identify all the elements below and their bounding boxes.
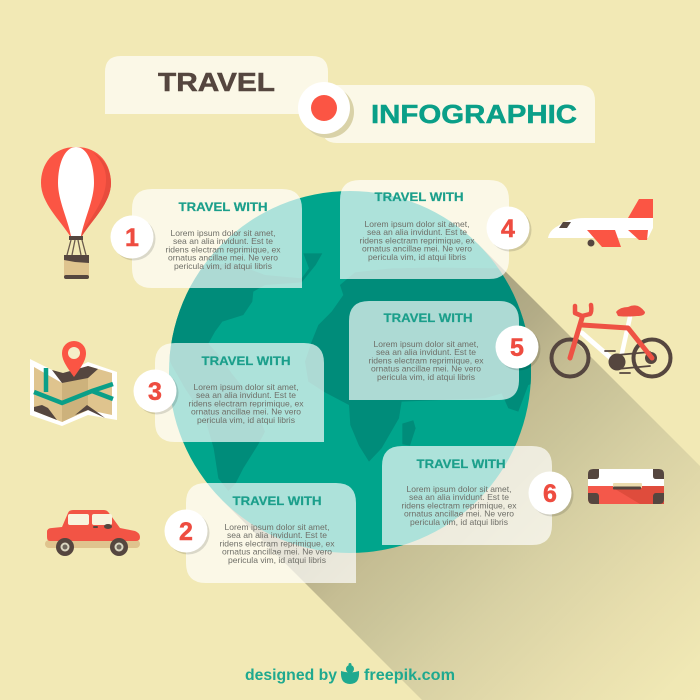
panel 1 body text: Lorem ipsum dolor sit amet, [170, 228, 276, 238]
panel 3: TRAVEL WITH [202, 356, 290, 368]
number badge 2 [164, 510, 210, 554]
globe [162, 191, 538, 553]
panel 3 [155, 343, 324, 442]
number badge 2: 2 [179, 518, 193, 546]
panel 5 [349, 301, 519, 400]
title word: TRAVEL: TRAVEL [158, 67, 275, 97]
panel 1 body text [166, 228, 281, 271]
panel 6 body text: sea an alia invidunt. Est te [409, 492, 509, 502]
panel 1 body text: ridens electram reprimique, ex [166, 244, 281, 254]
panel 2: TRAVEL WITH [232, 496, 322, 508]
title panel: travel [105, 56, 328, 114]
panel 2 [186, 483, 356, 583]
panel 4 [340, 180, 509, 279]
panel 4: TRAVEL WITH [374, 192, 464, 204]
panel 6 body text: Lorem ipsum dolor sit amet, [406, 484, 512, 494]
panel 4 body text: pericula vim, id atqui libris [368, 252, 466, 262]
icon: freepik logo [341, 663, 359, 684]
panel 1 [132, 189, 302, 288]
panel 4 body text: Lorem ipsum dolor sit amet, [364, 219, 470, 229]
panel 4 body text: sea an alia invidunt. Est te [367, 227, 467, 237]
panel 4 body text [360, 219, 475, 262]
panel 2 body text: Lorem ipsum dolor sit amet, [224, 522, 330, 532]
panel 4 body text: ornatus ancillae mei. Ne vero [362, 244, 472, 254]
footer credit [245, 663, 455, 684]
panel 6 body text [402, 484, 517, 527]
panel 2 body text: sea an alia invidunt. Est te [227, 530, 327, 540]
panel 2 body text: ornatus ancillae mei. Ne vero [222, 547, 332, 557]
panel 2 body text: ridens electram reprimique, ex [220, 538, 335, 548]
panel 2 body text [220, 522, 335, 565]
title word: INFOGRAPHIC: INFOGRAPHIC [371, 99, 577, 129]
number badge 4 [486, 206, 532, 252]
number badge 6 [528, 472, 574, 516]
number badge 3: 3 [148, 378, 162, 406]
panel 6 body text: ridens electram reprimique, ex [402, 500, 517, 510]
panel 6: TRAVEL WITH [416, 459, 506, 471]
number badge 4: 4 [501, 215, 515, 243]
number badge 6: 6 [543, 480, 557, 508]
panel 3 body text: Lorem ipsum dolor sit amet, [194, 382, 298, 392]
title panel: infographic [322, 85, 595, 143]
number badge 1: 1 [125, 224, 139, 252]
icon: bicycle [552, 305, 670, 376]
panel 3 body text: ridens electram reprimique, ex [188, 398, 304, 408]
title badge [298, 82, 354, 138]
panel 1 body text: sea an alia invidunt. Est te [173, 236, 273, 246]
panel 5 body text: ornatus ancillae mei. Ne vero [371, 364, 481, 374]
number badge 1 [110, 216, 156, 260]
panel 5 body text: Lorem ipsum dolor sit amet, [374, 339, 478, 349]
panel 5 body text: ridens electram reprimique, ex [368, 355, 484, 365]
panel 1 body text: ornatus ancillae mei. Ne vero [168, 253, 278, 263]
panel 4 body text: ridens electram reprimique, ex [360, 235, 475, 245]
panel 3 body text: pericula vim, id atqui libris [197, 415, 295, 425]
panel 3 body text: ornatus ancillae mei. Ne vero [191, 407, 301, 417]
panel 1 body text: pericula vim, id atqui libris [174, 261, 272, 271]
icon: folded map with pin [30, 341, 117, 426]
footer credit: freepik.com [364, 667, 455, 684]
footer credit: designed by [245, 667, 337, 684]
number badge 3 [134, 370, 178, 414]
panel 5 body text: pericula vim, id atqui libris [377, 372, 475, 382]
panel 5 body text: sea an alia invidunt. Est te [376, 347, 476, 357]
icon: airplane [548, 199, 653, 247]
panel 5: TRAVEL WITH [384, 313, 472, 325]
icon: suitcase [588, 469, 664, 504]
panel 6 [382, 446, 552, 545]
panel 3 body text [188, 382, 304, 425]
number badge 5 [496, 326, 540, 370]
panel 6 body text: ornatus ancillae mei. Ne vero [404, 509, 514, 519]
number badge 5: 5 [510, 334, 524, 362]
panel 2 body text: pericula vim, id atqui libris [228, 555, 326, 565]
icon: hot air balloon [41, 147, 111, 279]
panel 6 body text: pericula vim, id atqui libris [410, 517, 508, 527]
icon: car [45, 510, 140, 556]
globe long shadow [222, 244, 700, 700]
panel 1: TRAVEL WITH [178, 202, 268, 214]
panel 3 body text: sea an alia invidunt. Est te [196, 390, 296, 400]
panel 5 body text [368, 339, 484, 382]
